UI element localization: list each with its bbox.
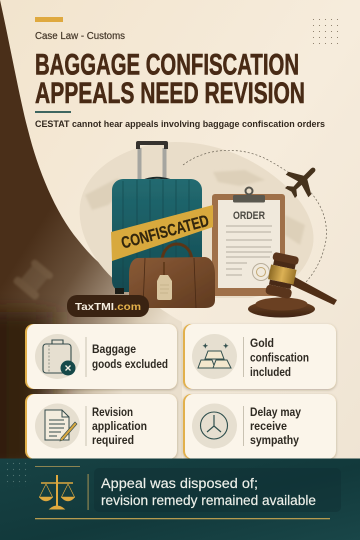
world map blob	[80, 142, 313, 298]
icon: suitcase with cross	[43, 340, 76, 376]
subtitle: CESTAT cannot hear appeals involving baggage confiscation orders	[35, 119, 325, 130]
card: delay may receive sympathy	[183, 394, 336, 459]
luggage tag	[163, 262, 165, 276]
card: gold confiscation included	[183, 324, 336, 389]
brown curved side panel	[0, 0, 182, 472]
brand pill	[67, 295, 149, 317]
footer banner	[0, 458, 360, 540]
icon: document and pen	[45, 410, 77, 441]
confiscated tape	[111, 205, 213, 261]
icon: plane	[279, 157, 326, 204]
teal rule	[35, 111, 71, 113]
card: revision application required	[25, 394, 177, 459]
icon: gold bars	[198, 343, 231, 368]
title	[35, 48, 305, 110]
card text: Baggage	[92, 344, 136, 356]
card text: confiscation	[250, 352, 309, 364]
card text: application	[92, 421, 147, 433]
brand pill: TaxTMI .com	[75, 301, 141, 313]
order heading: ORDER	[233, 210, 265, 222]
dot grid decoration	[311, 17, 340, 46]
card text	[250, 338, 309, 379]
accent bar	[35, 17, 63, 22]
faded gavel watermark	[12, 257, 56, 301]
clipboard with order	[212, 188, 285, 296]
suitcase	[112, 141, 202, 294]
icon: scales of justice	[39, 475, 75, 509]
card text	[92, 407, 147, 447]
icon: clock	[200, 412, 228, 439]
card text: sympathy	[250, 435, 300, 447]
footer text	[101, 476, 316, 508]
footer text: Appeal was disposed of;	[101, 476, 258, 491]
card text: included	[250, 367, 291, 379]
card text	[250, 407, 302, 447]
card text: required	[92, 435, 134, 447]
card text: Delay may	[250, 407, 302, 419]
card text: Revision	[92, 407, 133, 419]
gavel	[248, 252, 337, 318]
duffel bag	[129, 244, 215, 308]
card text: Gold	[250, 338, 274, 350]
illustration	[80, 141, 337, 318]
footer text: revision remedy remained available	[101, 493, 316, 508]
card: baggage goods excluded	[25, 324, 177, 389]
flight path	[183, 150, 326, 282]
seal	[252, 264, 270, 280]
card text: goods excluded	[92, 359, 168, 371]
card text	[92, 344, 168, 371]
card text: receive	[250, 421, 287, 433]
confiscated tape: CONFISCATED	[119, 212, 211, 253]
eyebrow label: Case Law - Customs	[35, 31, 125, 42]
